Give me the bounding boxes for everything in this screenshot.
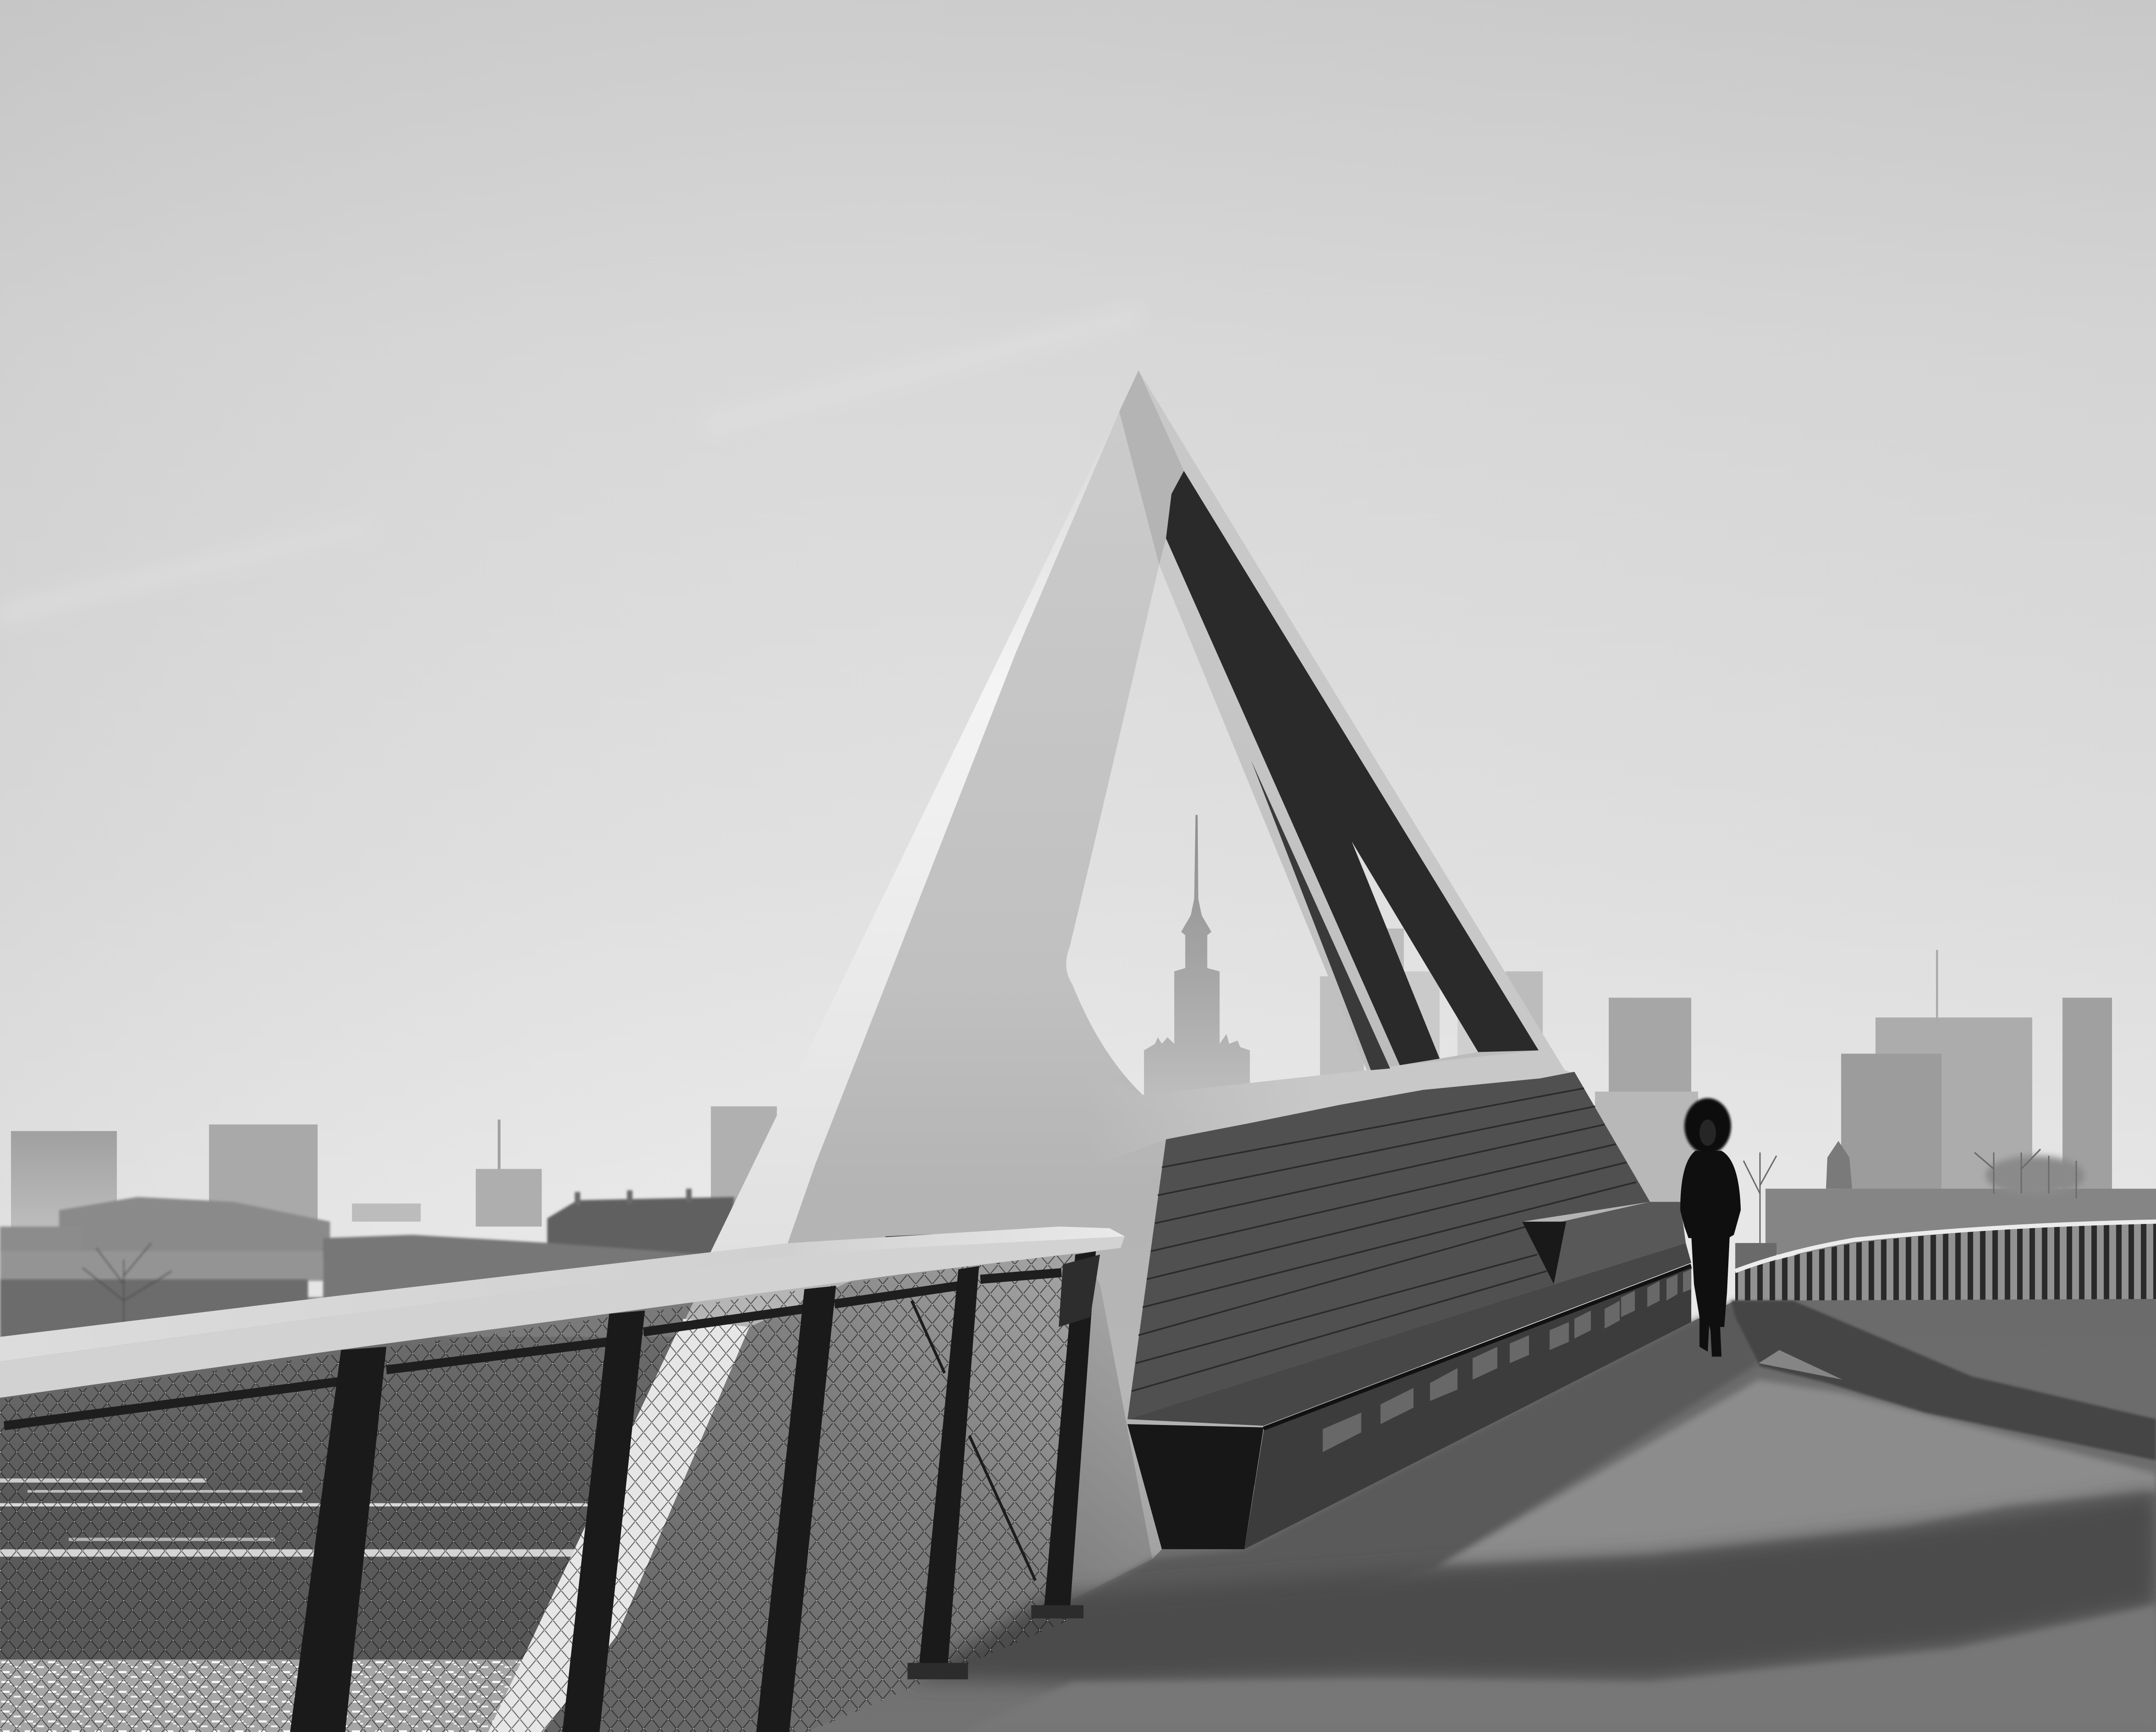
triangular concrete arch (488, 370, 1650, 1732)
post base plates (908, 1605, 1084, 1679)
arch shaded lower wall (543, 1227, 1152, 1732)
bench upper backrest right (1547, 1202, 1686, 1284)
distant skyline right (1595, 950, 2112, 1207)
backrest plank lines (1131, 1088, 1636, 1391)
fence rope (4, 1273, 1062, 1426)
arch base beam (1086, 1051, 1574, 1169)
fence posts (290, 1251, 1096, 1732)
lower arch shadow (908, 1492, 2156, 1682)
legs and boots (1691, 1235, 1730, 1357)
concrete deck (808, 1299, 2156, 1732)
bench backrest (1128, 1072, 1650, 1419)
bench seat (1128, 1243, 1691, 1426)
foreground fence (0, 1227, 1125, 1732)
lit sliver in the shadow (1758, 1350, 1843, 1380)
handrail front face (0, 1236, 1125, 1398)
lower right lit strip (962, 1605, 2156, 1732)
river behind the fence (0, 1337, 880, 1732)
fence mesh (0, 1251, 1072, 1732)
walking person silhouette (1680, 1098, 1741, 1357)
bench front face (1244, 1268, 1691, 1549)
arch main body (488, 370, 1650, 1732)
arch lower sunlit leg (488, 1319, 749, 1732)
distant skyline left (11, 1106, 777, 1246)
low city right with bare trees (1735, 1149, 2156, 1293)
narrow dark strut (1251, 761, 1390, 1070)
sunlit patch (1437, 1380, 2156, 1567)
far deck railing (1735, 1222, 2156, 1304)
face (1699, 1120, 1716, 1146)
arch top right ridge (1119, 370, 1565, 1070)
bench vent slots (1323, 1269, 1691, 1452)
low city left (0, 1189, 734, 1350)
small sign on post (1059, 1255, 1100, 1327)
handrail top surface (0, 1227, 1125, 1362)
timber bench (1128, 1072, 1691, 1549)
bench end block (1128, 1424, 1263, 1549)
fur hood (1684, 1098, 1731, 1154)
coat (1680, 1151, 1741, 1238)
arch top grey inner face (1119, 370, 1184, 565)
deck shadow beside the bench (962, 1301, 1758, 1663)
armrest wedge (1522, 1222, 1566, 1284)
fence diagonal cables (912, 1301, 1035, 1581)
distant towers behind the arch (1320, 929, 1543, 1075)
bench seat slit (1263, 1266, 1691, 1429)
far shadow band (1731, 1301, 2156, 1460)
dark underside struts (1166, 471, 1539, 1065)
dark box behind handrail (886, 1230, 1028, 1255)
palace of culture tower (1144, 815, 1250, 1100)
arch sunlit left edge (705, 370, 1138, 1263)
